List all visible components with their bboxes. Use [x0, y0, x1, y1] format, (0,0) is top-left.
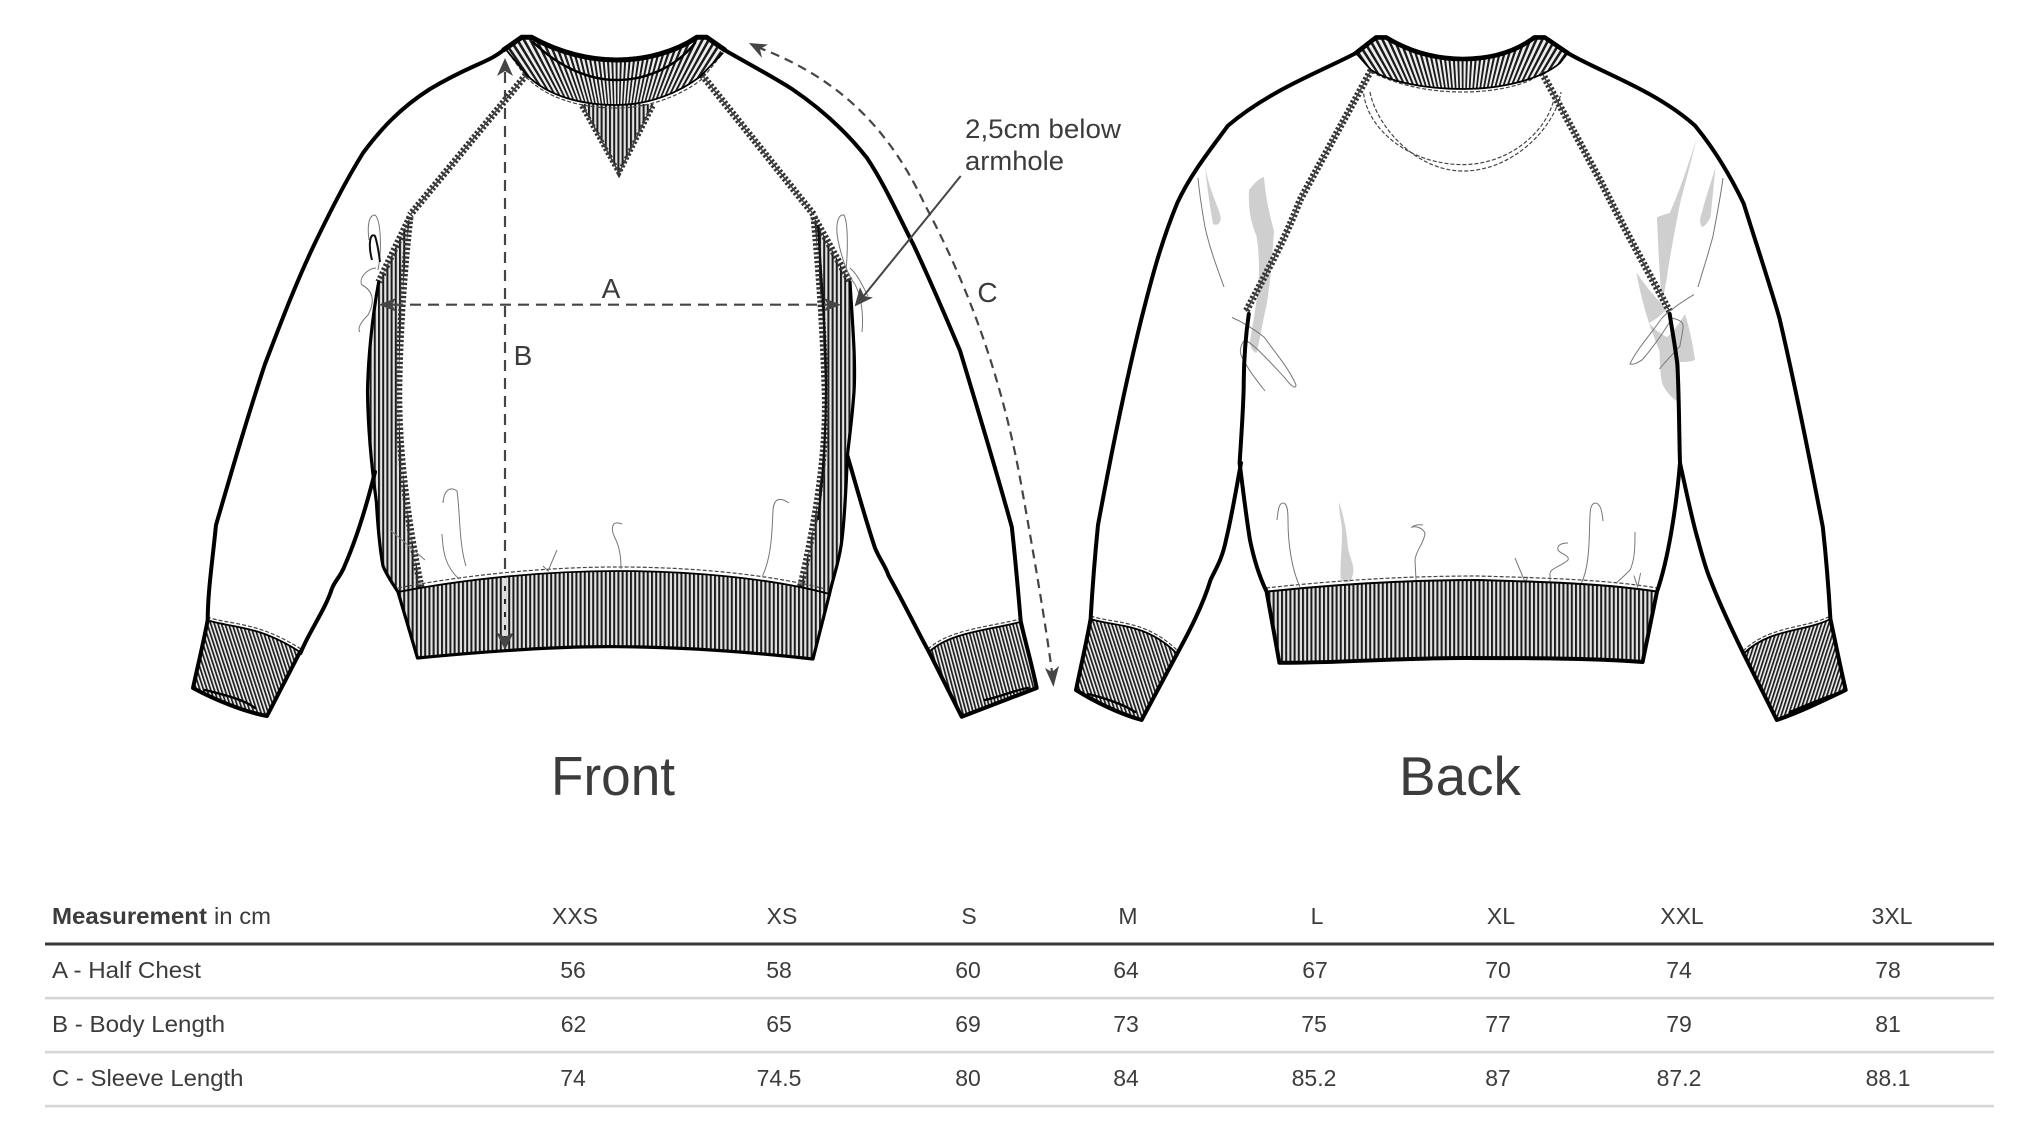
- row: B - Body Length: B - Body Length: [52, 1011, 225, 1037]
- measurement A: [379, 273, 841, 312]
- row: C - Sleeve Length: 84: [1113, 1065, 1139, 1091]
- row: B - Body Length: 81: [1875, 1011, 1901, 1037]
- front side panels: [368, 217, 855, 594]
- table header: in cm: [214, 903, 271, 929]
- row: B - Body Length: [52, 1011, 1901, 1037]
- table header: [52, 903, 1913, 929]
- row: B - Body Length: 79: [1666, 1011, 1692, 1037]
- row: B - Body Length: 73: [1113, 1011, 1139, 1037]
- front hem rib: [398, 571, 830, 659]
- callout: 2,5cm below armhole: [855, 114, 1122, 306]
- callout: 2,5cm below armhole: 2,5cm below: [965, 114, 1122, 144]
- measurement A: A: [602, 273, 621, 304]
- front seams: [207, 48, 1020, 649]
- front outline: [193, 37, 1037, 717]
- back sweatshirt: [1076, 30, 1846, 720]
- row: A - Half Chest: A - Half Chest: [52, 957, 202, 983]
- back outline: [1076, 37, 1846, 720]
- row: A - Half Chest: 70: [1485, 957, 1511, 983]
- row: A - Half Chest: [52, 957, 1901, 983]
- row: C - Sleeve Length: 87.2: [1657, 1065, 1701, 1091]
- front collar ribs: [508, 40, 722, 104]
- table rules: [45, 942, 1994, 1107]
- row: C - Sleeve Length: 88.1: [1866, 1065, 1910, 1091]
- row: A - Half Chest: 56: [560, 957, 586, 983]
- callout: 2,5cm below armhole: armhole: [965, 146, 1064, 176]
- heading: Back: Back: [1399, 745, 1521, 807]
- heading: Front: Front: [551, 745, 675, 807]
- row: C - Sleeve Length: [52, 1065, 1910, 1091]
- front cuffs: [193, 620, 1037, 717]
- back wrinkles: [1198, 178, 1723, 587]
- row: A - Half Chest: 64: [1113, 957, 1139, 983]
- row: B - Body Length: 75: [1301, 1011, 1327, 1037]
- row: B - Body Length: 77: [1485, 1011, 1511, 1037]
- table header: M: [1118, 903, 1138, 929]
- back cuffs: [1076, 619, 1846, 720]
- table header: XXL: [1660, 903, 1704, 929]
- row: C - Sleeve Length: 87: [1485, 1065, 1511, 1091]
- table header: S: [961, 903, 977, 929]
- front sweatshirt: [193, 30, 1037, 717]
- table header: 3XL: [1872, 903, 1913, 929]
- table header: Measurement: [52, 903, 207, 929]
- row: C - Sleeve Length: 74.5: [757, 1065, 801, 1091]
- front gusset: [582, 104, 653, 173]
- table header: XS: [767, 903, 797, 929]
- back collar ribs: [1358, 40, 1566, 88]
- back shading: [1205, 139, 1716, 582]
- table header: L: [1311, 903, 1324, 929]
- measurement C: [749, 43, 1059, 687]
- size table: [45, 903, 1994, 1107]
- front wrinkles: [359, 215, 868, 579]
- measurement B: B: [514, 340, 532, 371]
- row: A - Half Chest: 58: [766, 957, 792, 983]
- measurement B: [496, 58, 532, 650]
- row: C - Sleeve Length: 85.2: [1292, 1065, 1336, 1091]
- row: A - Half Chest: 67: [1302, 957, 1328, 983]
- row: B - Body Length: 65: [766, 1011, 792, 1037]
- back hem rib: [1267, 580, 1657, 663]
- row: C - Sleeve Length: C - Sleeve Length: [52, 1065, 244, 1091]
- row: C - Sleeve Length: 74: [560, 1065, 586, 1091]
- row: B - Body Length: 62: [561, 1011, 586, 1037]
- back seams: [1091, 70, 1830, 651]
- table header: XL: [1487, 903, 1515, 929]
- measurement C: C: [977, 277, 998, 308]
- row: B - Body Length: 69: [955, 1011, 981, 1037]
- row: C - Sleeve Length: 80: [955, 1065, 981, 1091]
- row: A - Half Chest: 60: [955, 957, 981, 983]
- row: A - Half Chest: 74: [1666, 957, 1692, 983]
- row: A - Half Chest: 78: [1875, 957, 1901, 983]
- table header: XXS: [552, 903, 598, 929]
